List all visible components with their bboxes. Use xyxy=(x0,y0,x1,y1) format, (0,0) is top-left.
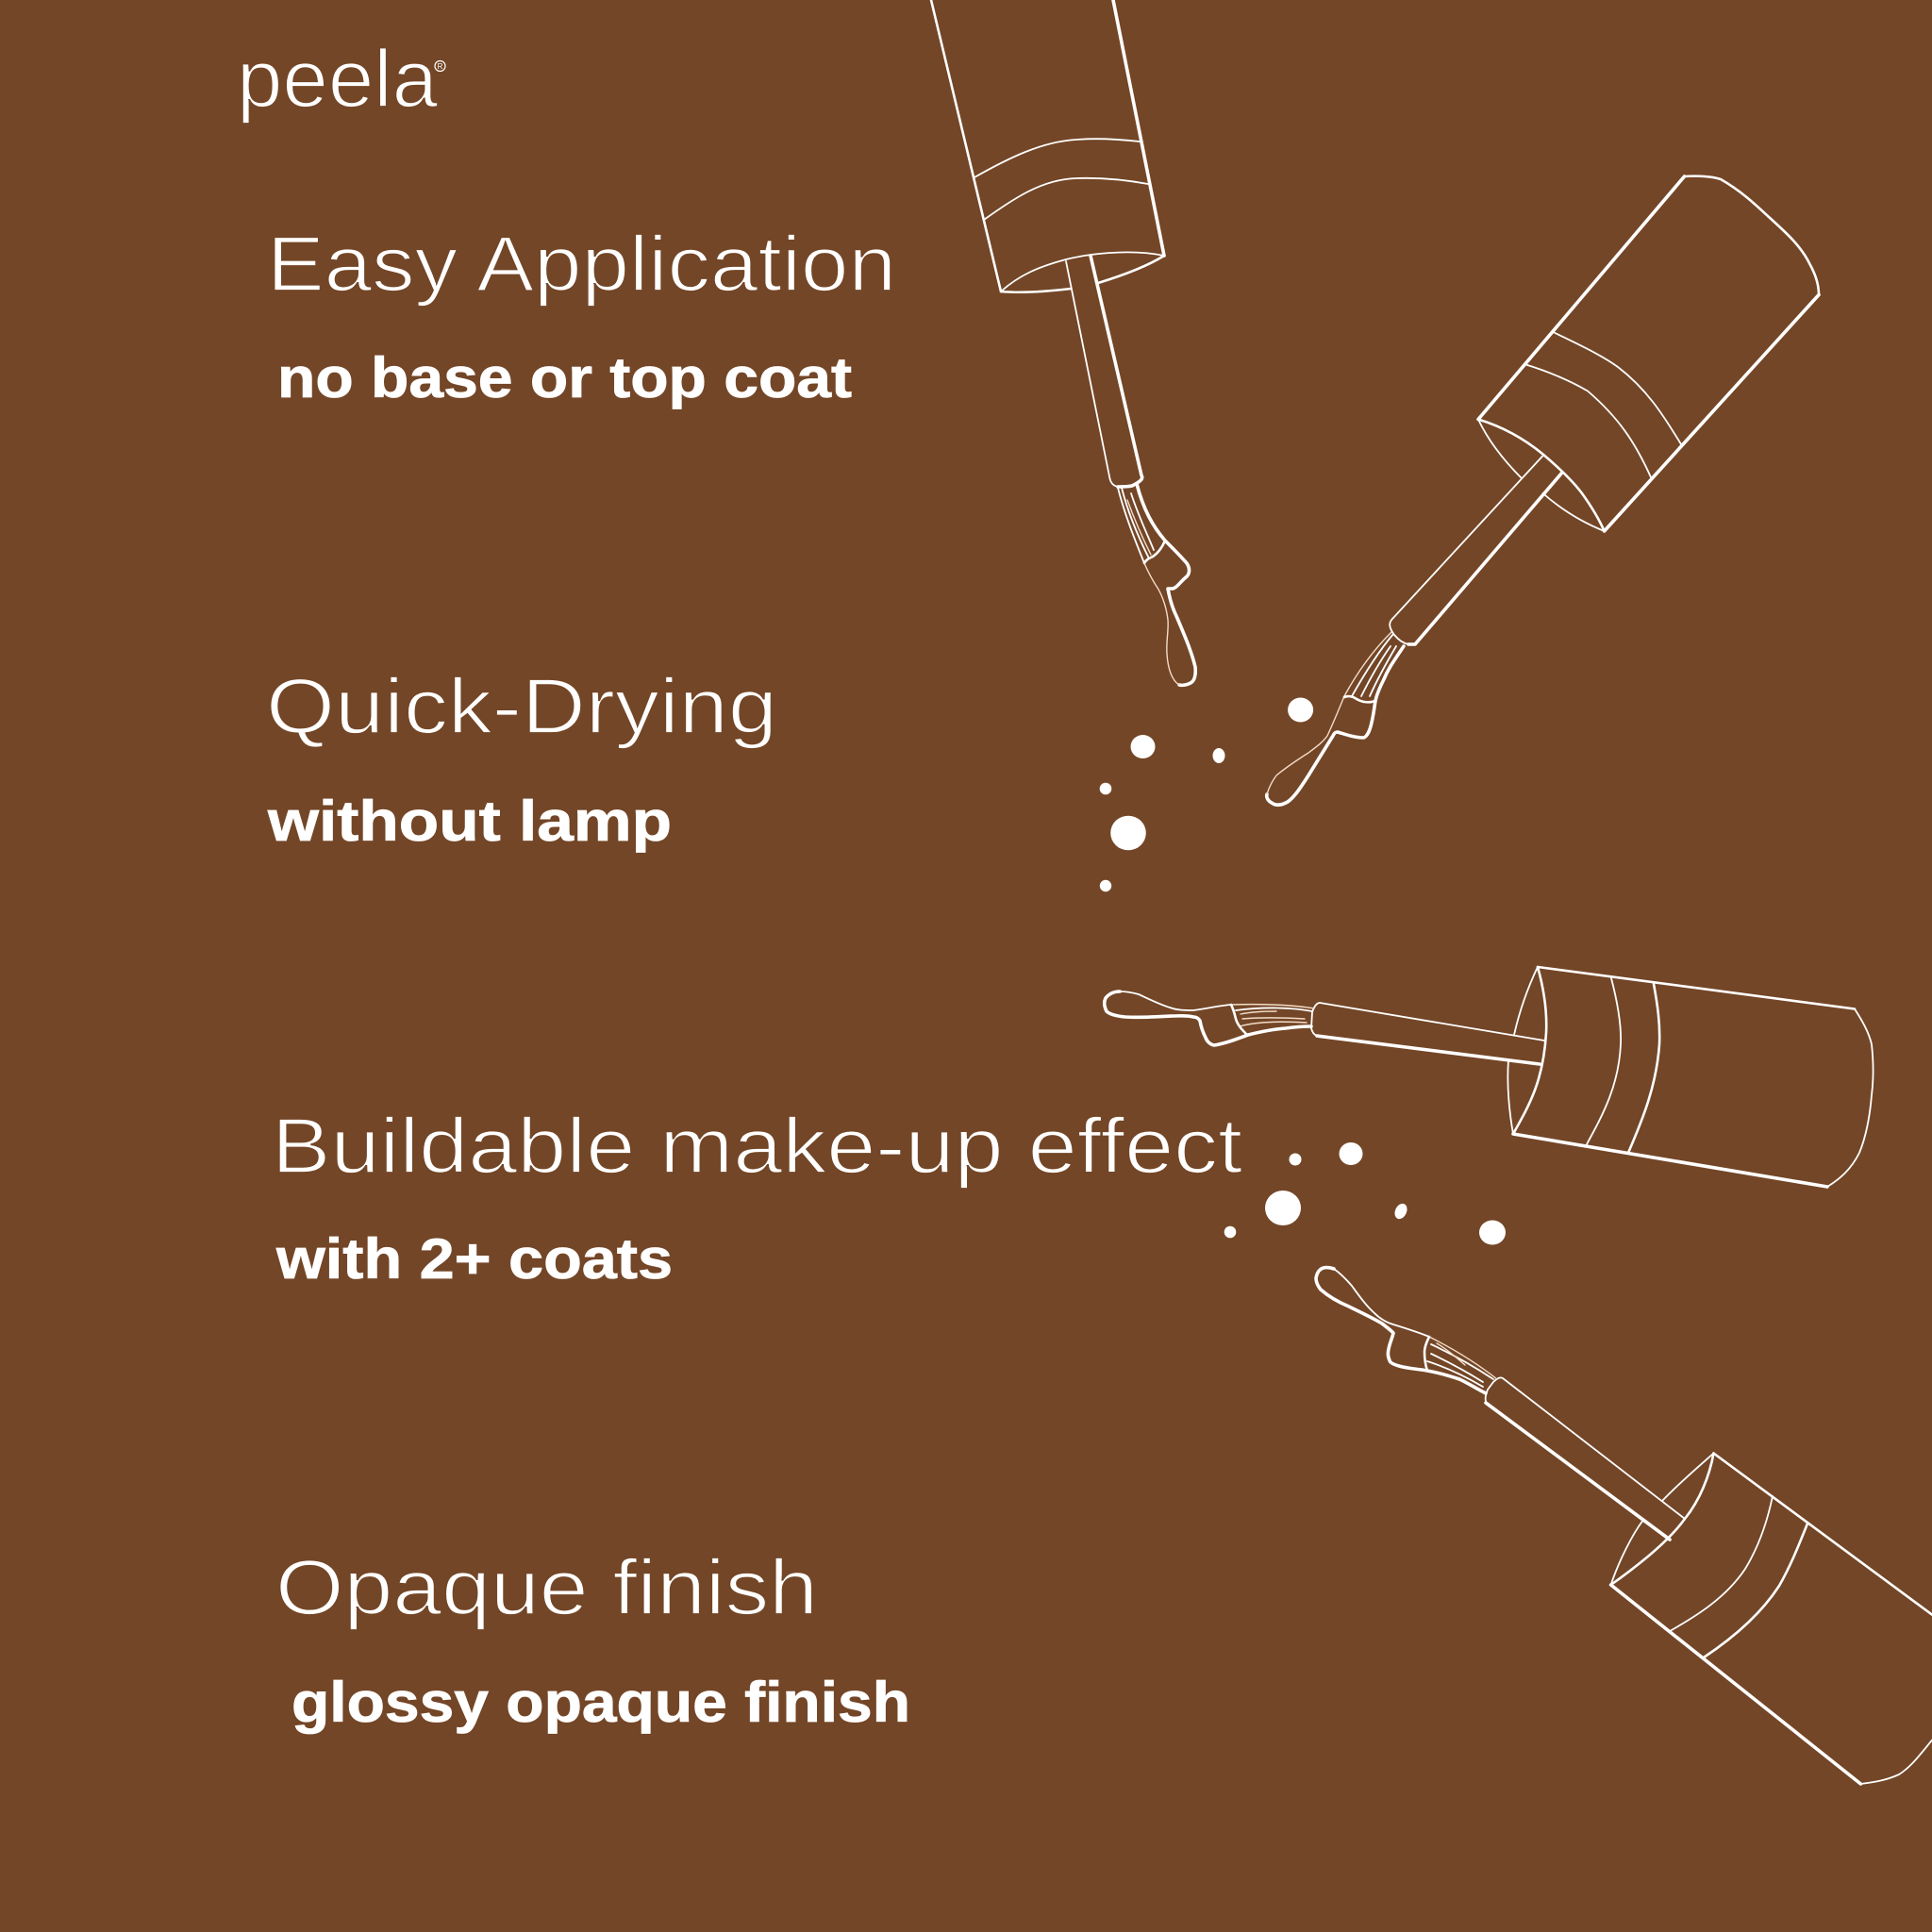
logo: peela: peela xyxy=(237,34,438,125)
heading: Opaque finish: Opaque finish xyxy=(275,1543,818,1631)
stem xyxy=(1066,256,1142,487)
illustration: nail polish brush, upper right xyxy=(1267,176,1819,805)
paint dots, lower cluster xyxy=(1224,1142,1506,1245)
heading: Buildable make-up effect: Buildable make-up effect xyxy=(272,1102,1242,1190)
subheading: no base or top coat: no base or top coat xyxy=(277,346,852,409)
illustration: nail polish brush, middle right xyxy=(1105,967,1874,1187)
illustration: nail polish brush, lower right xyxy=(1316,1268,1932,1784)
stem xyxy=(1390,456,1561,644)
subheading: without lamp: without lamp xyxy=(267,790,672,853)
bottle cap body xyxy=(1611,1453,1932,1784)
illustration: nail polish brush, top xyxy=(931,0,1195,685)
bottle cap body xyxy=(1478,176,1819,531)
stem xyxy=(1311,1003,1544,1064)
brush and drip xyxy=(1267,632,1404,805)
paint dots, upper cluster xyxy=(1100,698,1313,891)
brush and drip xyxy=(1316,1268,1497,1393)
logo: peela: R xyxy=(438,62,443,71)
brush and drip xyxy=(1118,484,1195,685)
heading: Easy Application: Easy Application xyxy=(267,220,896,308)
bottle cap body xyxy=(931,0,1164,292)
subheading: glossy opaque finish: glossy opaque finish xyxy=(291,1671,910,1734)
bottle cap body xyxy=(1507,967,1874,1187)
heading: Quick-Drying: Quick-Drying xyxy=(266,662,777,750)
brush and drip xyxy=(1105,991,1314,1045)
stem xyxy=(1486,1377,1685,1540)
subheading: with 2+ coats: with 2+ coats xyxy=(275,1227,673,1291)
